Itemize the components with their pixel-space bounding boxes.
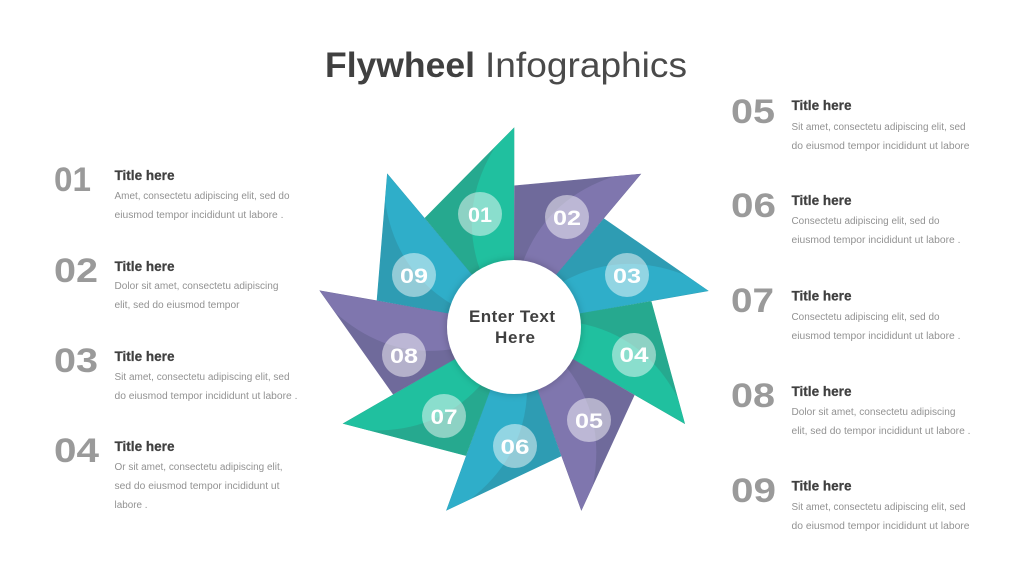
badge 08 [382, 333, 426, 377]
item 03 [54, 342, 298, 402]
item 08: Title here [792, 383, 852, 399]
item 05 [731, 93, 970, 152]
badge 02: 02 [553, 207, 581, 230]
item 04: labore . [114, 500, 148, 511]
item 04: Or sit amet, consectetu adipiscing elit, [114, 462, 282, 473]
item 01: Amet, consectetu adipiscing elit, sed do [114, 191, 290, 202]
badge 06: 06 [500, 436, 530, 459]
item 09: Sit amet, consectetu adipiscing elit, sed [792, 502, 966, 513]
badge 01: 01 [468, 204, 492, 227]
item 02: elit, sed do eiusmod tempor [114, 300, 240, 311]
item 08: elit, sed do tempor incididunt ut labore . [792, 426, 970, 437]
blade 03 [499, 203, 708, 325]
item 09: 09 [731, 472, 776, 510]
item 07: Consectetu adipiscing elit, sed do [792, 312, 940, 323]
badge 04: 04 [620, 344, 649, 367]
title: Flywheel [325, 46, 475, 85]
item 01: Title here [114, 167, 175, 183]
blade 09 [319, 174, 514, 382]
item 02: Title here [114, 258, 175, 274]
badge 03: 03 [613, 265, 641, 288]
item 01 [54, 161, 290, 221]
badge 07 [422, 394, 466, 438]
item 05: Title here [792, 97, 852, 113]
badge 07: 07 [430, 406, 458, 429]
item 07: Title here [792, 288, 852, 304]
blade 08 [305, 291, 514, 413]
badge 09: 09 [400, 265, 428, 288]
item 09: do eiusmod tempor incididunt ut labore [792, 521, 970, 532]
centre hub: Enter Text [469, 307, 555, 326]
blade 07 [343, 325, 558, 501]
item 04: sed do eiusmod tempor incididunt ut [114, 481, 280, 492]
item 03: do eiusmod tempor incididunt ut labore . [114, 391, 298, 402]
item 04 [54, 432, 282, 511]
item 01: 01 [54, 161, 91, 199]
item 03: Sit amet, consectetu adipiscing elit, sed [114, 372, 290, 383]
blade 02 [446, 117, 641, 325]
blade 05 [514, 295, 665, 510]
item 05: 05 [731, 93, 775, 131]
item 03: Title here [114, 348, 175, 364]
item 04: 04 [54, 432, 99, 470]
badge 04 [612, 333, 656, 377]
blade 06 [447, 325, 598, 541]
badge 03 [605, 253, 649, 297]
item 01: eiusmod tempor incididunt ut labore . [114, 210, 284, 221]
badge 09 [392, 253, 436, 297]
item 06: Consectetu adipiscing elit, sed do [792, 216, 940, 227]
item 07 [731, 282, 960, 342]
item 05: Sit amet, consectetu adipiscing elit, sed [792, 122, 966, 133]
item 08 [731, 377, 970, 437]
item 09: Title here [792, 478, 852, 494]
badge 05: 05 [575, 410, 603, 433]
badge 06 [493, 424, 537, 468]
badge 02 [545, 195, 589, 239]
blade 01 [425, 128, 514, 325]
item 06: 06 [731, 187, 776, 225]
item 06: eiusmod tempor incididunt ut labore . [792, 235, 960, 246]
item 09 [731, 472, 970, 532]
item 02 [54, 252, 278, 311]
item 05: do eiusmod tempor incididunt ut labore [792, 141, 970, 152]
badge 08: 08 [390, 345, 418, 368]
badge 01 [458, 192, 502, 236]
item 07: eiusmod tempor incididunt ut labore . [792, 331, 960, 342]
centre hub [447, 260, 581, 394]
item 06: Title here [792, 192, 852, 208]
item 02: Dolor sit amet, consectetu adipiscing [114, 281, 278, 292]
item 08: 08 [731, 377, 775, 415]
item 08: Dolor sit amet, consectetu adipiscing [792, 407, 956, 418]
title [325, 46, 687, 85]
item 03: 03 [54, 342, 98, 380]
centre hub: Here [495, 328, 535, 347]
blade 04 [514, 248, 729, 424]
item 07: 07 [731, 282, 774, 320]
badge 05 [567, 398, 611, 442]
title: Infographics [485, 46, 687, 85]
item 06 [731, 187, 960, 246]
flywheel diagram [305, 117, 729, 541]
item 04: Title here [114, 438, 175, 454]
item 02: 02 [54, 252, 98, 290]
